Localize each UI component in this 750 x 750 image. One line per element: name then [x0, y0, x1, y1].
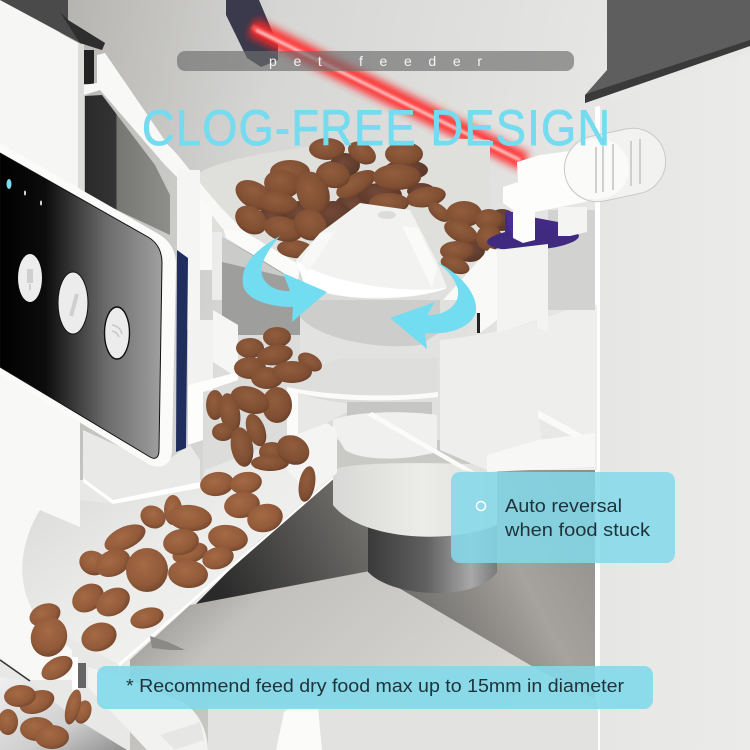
phone body: [0, 143, 176, 467]
navy back strip: [176, 250, 188, 452]
feed chute: [22, 423, 337, 666]
button: wifi: [104, 307, 130, 359]
note: food size: [97, 666, 653, 709]
button: bone: [58, 272, 88, 334]
lower table: [130, 571, 597, 750]
motor: [368, 520, 497, 593]
arrow: right rotation: [390, 262, 476, 349]
curved shelf: [287, 358, 438, 438]
kibble: chute: [0, 469, 286, 749]
arrow: left rotation: [243, 236, 327, 322]
title: CLOG-FREE DESIGN: [142, 101, 610, 157]
chute upper lip: [287, 423, 337, 495]
phone screen: [0, 153, 162, 458]
gray inner cavity: [222, 237, 300, 335]
subtitle pill: [177, 51, 574, 71]
right white block: [367, 305, 597, 472]
red laser sensor: [226, 0, 525, 162]
rotor cylinders: [300, 300, 440, 459]
hopper back disc: [195, 139, 490, 265]
kibble: top pile: [230, 137, 503, 278]
inner rail: [223, 228, 300, 282]
lower cavity: [190, 465, 597, 700]
hopper cone: [296, 203, 447, 299]
lower white outlet and bowl: [0, 636, 598, 750]
right housing panel: [595, 52, 750, 750]
top left white panel and lid: [0, 0, 105, 200]
left frame block: [188, 310, 238, 445]
button: microphone: [18, 254, 42, 302]
lower white cylinder: [333, 440, 497, 537]
white diagonal rail and frame: [84, 53, 246, 330]
callout: auto reversal: when food stuck: [504, 520, 651, 540]
kibble: middle pile: [206, 327, 325, 503]
subtitle pill: pet feeder: [269, 53, 482, 69]
kibble: rear pile: [257, 153, 516, 262]
back wall: [60, 0, 610, 480]
status dots: [6, 179, 42, 206]
tray under phone: [83, 430, 200, 504]
phone app: [0, 143, 188, 467]
dark lid: [585, 0, 750, 103]
dark recess behind phone: [84, 50, 170, 235]
callout: auto reversal: Auto reversal: [505, 496, 622, 516]
note: food size: * Recommend feed dry food max up to 15mm in diameter: [126, 676, 624, 696]
lower feeder column: [203, 335, 300, 490]
right bracket and clip: [443, 122, 672, 333]
callout: auto reversal: [451, 472, 675, 563]
left lower panel: [0, 372, 80, 680]
